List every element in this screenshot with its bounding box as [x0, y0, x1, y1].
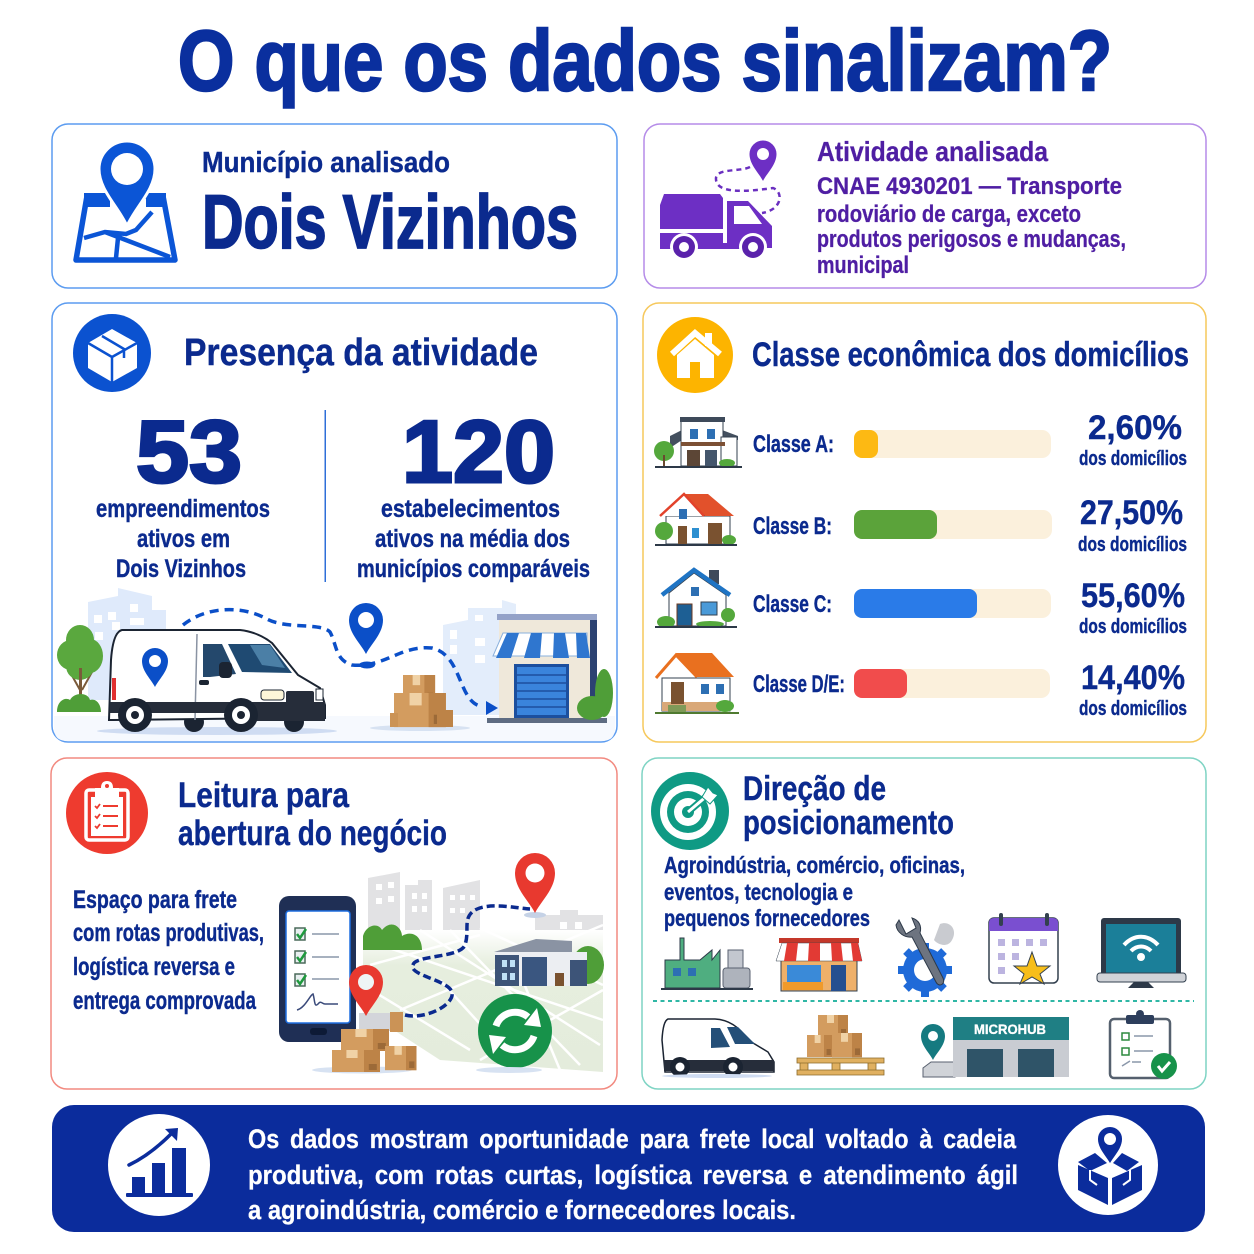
heading: direção: Direção de	[743, 770, 886, 808]
icon: laptop with wifi	[1097, 918, 1186, 988]
municipality name: Dois Vizinhos	[202, 180, 578, 265]
icon: boxes on pallet	[797, 1015, 884, 1075]
icon: factory	[661, 938, 753, 990]
value	[1079, 659, 1187, 720]
heading: leitura	[178, 776, 447, 853]
label: Classe B:	[753, 513, 832, 540]
icon: store	[776, 938, 862, 991]
value	[1078, 494, 1187, 556]
label: Classe C:	[753, 591, 832, 618]
text block: eventos, tecnologia e	[664, 879, 853, 905]
stat: 120: estabelecimentos	[381, 495, 560, 523]
value: 55,60%	[1081, 577, 1185, 615]
bar	[854, 669, 1050, 698]
value: 14,40%	[1081, 659, 1185, 697]
icon: house B	[655, 494, 737, 546]
value: dos domicílios	[1079, 616, 1187, 638]
value: dos domicílios	[1078, 534, 1187, 556]
text block	[73, 886, 264, 1015]
value	[1079, 409, 1187, 470]
stat: 120: 120	[402, 402, 555, 501]
stat: 53: ativos em	[137, 525, 230, 553]
icon: calendar	[989, 913, 1058, 984]
label: Classe A:	[753, 431, 834, 458]
heading: presença da atividade: Presença da atividade	[184, 332, 538, 374]
illustration: map and delivery	[279, 853, 604, 1074]
row: classe A	[654, 409, 1187, 470]
stat: 120: municípios comparáveis	[357, 555, 590, 583]
activity description: municipal	[817, 252, 909, 279]
icon: house C	[655, 570, 737, 628]
activity description: produtos perigosos e mudanças,	[817, 226, 1126, 253]
activity description	[817, 173, 1126, 279]
panel: município	[52, 124, 617, 288]
icon: growth chart	[108, 1114, 210, 1216]
bar	[854, 510, 1052, 539]
panel: atividade	[644, 124, 1206, 288]
stat: 53: empreendimentos	[96, 495, 270, 523]
bar	[854, 589, 1051, 618]
icon: microhub	[921, 1017, 1069, 1077]
text block: logística reversa e	[73, 953, 235, 981]
text block	[664, 852, 965, 931]
icon: box with pin	[1058, 1115, 1158, 1215]
text block: Agroindústria, comércio, oficinas,	[664, 852, 965, 878]
stat: 53: Dois Vizinhos	[116, 555, 246, 583]
conclusion text	[248, 1124, 1018, 1225]
panel: direção	[642, 758, 1206, 1089]
text block: com rotas produtivas,	[73, 919, 264, 947]
conclusion text: produtiva, com rotas curtas, logística reversa e atendimento ágil	[248, 1160, 1018, 1190]
icon: package	[73, 314, 151, 392]
heading: direção	[743, 770, 954, 842]
panel: leitura	[51, 758, 617, 1089]
bar	[854, 430, 1051, 458]
stat: 53	[96, 402, 270, 583]
icon: van	[662, 1019, 774, 1078]
icon: truck with route	[660, 140, 780, 261]
row: classe C	[655, 570, 1187, 638]
icon: checklist	[1110, 1010, 1177, 1079]
text block: pequenos fornecedores	[664, 905, 870, 931]
value: dos domicílios	[1079, 698, 1187, 720]
heading: direção: posicionamento	[743, 804, 954, 842]
stat: 120	[357, 402, 590, 583]
activity description: CNAE 4930201 — Transporte	[817, 173, 1122, 200]
conclusion text: a agroindústria, comércio e fornecedores locais.	[248, 1195, 796, 1225]
icon: target	[651, 772, 729, 850]
value: dos domicílios	[1079, 448, 1187, 470]
panel: presença da atividade	[52, 303, 617, 742]
icon: house A	[654, 417, 742, 468]
icon: house	[657, 317, 733, 393]
value	[1079, 577, 1187, 638]
banner: conclusion	[52, 1105, 1205, 1232]
illustration: delivery van route	[54, 588, 615, 741]
heading: leitura: abertura do negócio	[178, 814, 447, 853]
row: classe D/E	[655, 653, 1187, 720]
activity description: rodoviário de carga, exceto	[817, 201, 1081, 228]
heading: atividade analisada: Atividade analisada	[817, 136, 1048, 167]
value: 27,50%	[1080, 494, 1183, 532]
value: 2,60%	[1088, 409, 1182, 447]
label: município analisado: Município analisado	[202, 147, 450, 179]
icon: gear and wrench	[896, 918, 954, 997]
label: Classe D/E:	[753, 671, 845, 698]
conclusion text: Os dados mostram oportunidade para frete local voltado à cadeia	[248, 1124, 1017, 1154]
text block: entrega comprovada	[73, 987, 257, 1015]
text block: Espaço para frete	[73, 886, 237, 914]
title: O que os dados sinalizam?	[178, 14, 1112, 109]
icon: microhub: MICROHUB	[974, 1021, 1046, 1037]
icon: clipboard	[66, 772, 148, 854]
heading: leitura: Leitura para	[178, 776, 349, 815]
icon: map pin	[76, 141, 175, 260]
stat: 53: 53	[136, 402, 242, 501]
icon: house D/E	[655, 653, 739, 714]
stat: 120: ativos na média dos	[375, 525, 570, 553]
row: classe B	[655, 494, 1187, 556]
panel: classe econômica	[643, 303, 1206, 742]
